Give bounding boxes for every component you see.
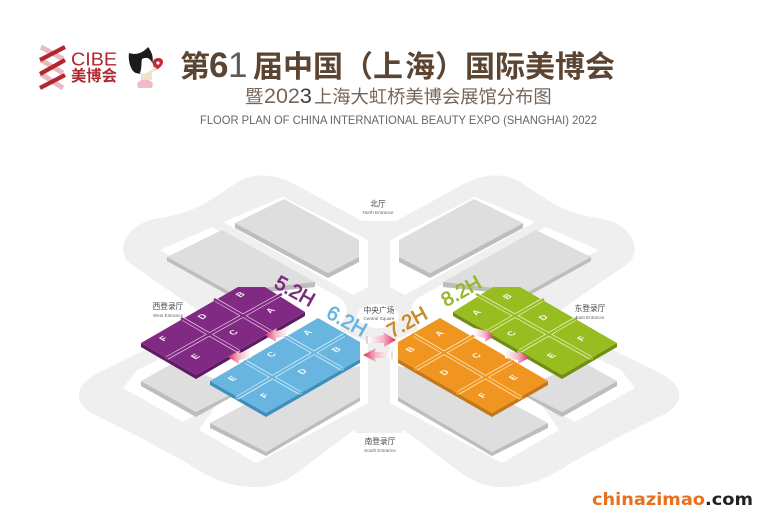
watermark: chinazimao .com: [592, 490, 753, 510]
entrance label: south: 南登录厅: [365, 436, 396, 446]
hall letters: blue: D: [295, 367, 310, 376]
english subtitle: FLOOR PLAN OF CHINA INTERNATIONAL BEAUTY EXPO (SHANGHAI) 2022: [200, 113, 597, 127]
hall 6.2H: blue: [210, 318, 360, 417]
entrance label: central square: Central Square: [364, 316, 395, 321]
hall letters: orange: [403, 329, 520, 399]
entrance label: east: [575, 303, 606, 320]
subtitle: 3: [300, 84, 312, 108]
hall label: 7.2H: 7.2H: [384, 303, 431, 343]
entrance label: south: [364, 436, 396, 453]
hall letters: purple: A: [263, 306, 278, 315]
hall letters: blue: C: [264, 350, 279, 359]
hall letters: purple: D: [195, 312, 210, 321]
hall letters: orange: A: [432, 329, 447, 338]
arrow: purple-blue south: [228, 350, 251, 364]
subtitle: 暨: [245, 86, 263, 107]
logo: CIBE: CIBE: [71, 50, 117, 70]
hall label: 8.2H: 8.2H: [438, 272, 485, 312]
hall letters: green: A: [469, 308, 484, 317]
entrance label: west: West Entrance: [153, 313, 183, 318]
hall letters: orange: F: [476, 391, 490, 399]
entrance label: north: 北厅: [370, 200, 386, 208]
grey halls: east side: [398, 199, 617, 456]
title digit: 1: [228, 46, 247, 85]
hall letters: green: [469, 292, 589, 360]
arrow: orange-green south: [505, 350, 529, 364]
title: 海）国际美博会: [405, 51, 615, 84]
subtitle: 上海大虹桥美博会展馆分布图: [314, 86, 552, 107]
hall letters: green: E: [544, 351, 558, 360]
hall 5.2H: purple: [141, 287, 305, 379]
hall letters: green: C: [504, 329, 519, 338]
hall letters: green: D: [536, 313, 551, 322]
hall letters: orange: B: [403, 345, 418, 354]
hall 8.2H: green: [453, 287, 617, 379]
title: 6: [209, 46, 228, 85]
entrance label: central square: 中央广场: [364, 305, 395, 315]
entrance label: west: [153, 301, 184, 318]
arrow: central to orange: [367, 332, 396, 347]
logo: CIBE: [40, 47, 117, 88]
title: 第: [180, 51, 210, 84]
entrance label: north: North Entrance: [363, 210, 394, 215]
hall letters: purple: B: [233, 290, 248, 299]
entrance label: central square: [364, 305, 395, 321]
title: 届中国（上: [253, 51, 403, 84]
hall letters: green: F: [575, 334, 589, 342]
hall letters: purple: C: [226, 328, 241, 337]
hall label: 6.2H: 6.2H: [323, 302, 370, 342]
entrance label: south: South Entrance: [364, 448, 396, 453]
hall letters: purple: E: [188, 352, 202, 361]
logo: CIBE: 美博会: [71, 67, 117, 85]
hall letters: orange: D: [437, 368, 452, 377]
entrance label: east: 东登录厅: [575, 303, 606, 313]
hall letters: purple: F: [157, 334, 171, 342]
hall letters: orange: C: [469, 351, 484, 360]
arrow: orange-green north: [474, 328, 494, 342]
hall letters: green: B: [500, 292, 515, 301]
grey halls: west side: [141, 199, 360, 456]
entrance label: west: 西登录厅: [153, 301, 184, 311]
entrance label: north: [363, 200, 394, 215]
hall letters: purple: [157, 290, 278, 361]
hall letters: blue: [225, 328, 344, 399]
hall 7.2H: orange: [398, 318, 548, 417]
arrow: orange to central: [363, 348, 392, 362]
subtitle: 202: [264, 84, 300, 108]
icon: cat mascot: [129, 47, 163, 88]
hall letters: blue: A: [300, 328, 315, 337]
hall letters: blue: E: [225, 374, 239, 383]
entrance label: east: East Entrance: [576, 315, 605, 320]
floor plan: venue ground: [79, 175, 679, 487]
hall label: 5.2H: 5.2H: [271, 272, 318, 312]
arrow: purple-blue north: [265, 328, 288, 342]
hall letters: orange: E: [506, 373, 520, 382]
hall letters: blue: B: [329, 345, 344, 354]
hall letters: blue: F: [258, 391, 272, 399]
